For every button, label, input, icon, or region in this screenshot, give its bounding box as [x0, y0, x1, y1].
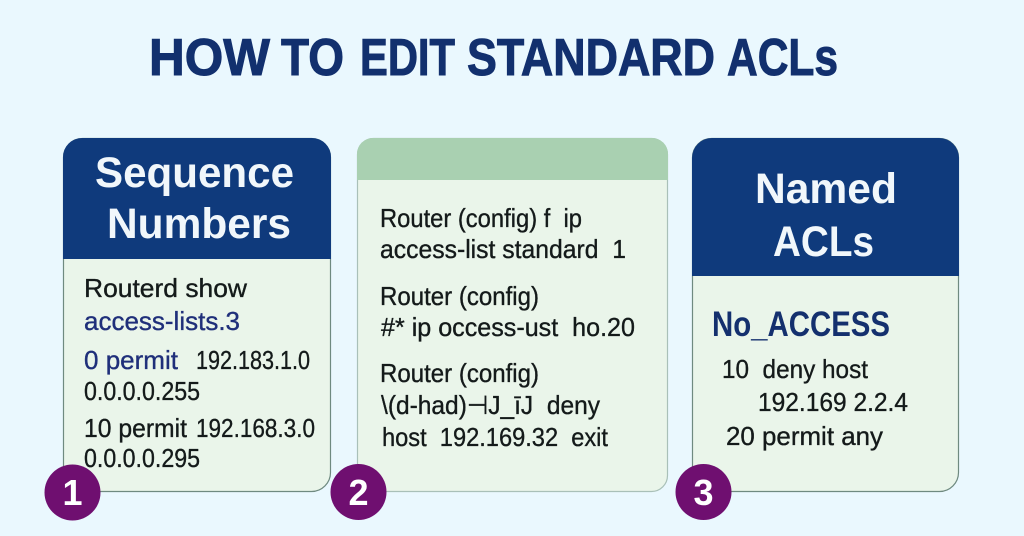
text block: show access-lists output: 0 permit: [84, 345, 179, 375]
heading: sequence numbers: Numbers: [107, 200, 291, 248]
panel: router config: [357, 138, 668, 492]
title: EDIT: [360, 29, 455, 87]
title: HOW: [149, 29, 271, 87]
panel header: green band: [357, 138, 668, 180]
title: TO: [281, 29, 344, 87]
panel body: sequence numbers: [64, 138, 330, 492]
heading: sequence numbers: [95, 149, 294, 248]
badge: step 1: 1: [62, 472, 83, 513]
text block: show access-lists output: 10 permit: [84, 413, 188, 443]
panel: sequence numbers: [63, 138, 331, 492]
panel header: named ACLs: [692, 138, 959, 276]
text block: ACL entries: 10 deny host: [722, 354, 869, 384]
text block: show access-lists output: [84, 273, 315, 473]
heading: named ACLs: Named: [755, 165, 897, 213]
panel body: router config: [358, 138, 668, 492]
panel body: named ACLs: [692, 138, 958, 492]
heading: sequence numbers: Sequence: [95, 149, 294, 197]
text block: ACL entries: 20 permit any: [726, 421, 883, 451]
text block: config commands: Router (config): [380, 281, 539, 311]
text block: config commands: Router (config): [380, 358, 539, 388]
text block: show access-lists output: 0.0.0.0.255: [84, 376, 200, 406]
text block: show access-lists output: 192.183.1.0: [196, 345, 310, 375]
text block: ACL entries: [722, 354, 908, 451]
heading: named ACLs: [755, 165, 897, 266]
badge: step 2: [330, 464, 386, 520]
badge: step 3: 3: [693, 472, 714, 513]
title: ACLs: [727, 29, 838, 87]
text block: config commands: \(d-had)⊣J_īJ deny: [381, 390, 600, 420]
title: [149, 29, 838, 87]
text block: show access-lists output: access-lists.3: [84, 306, 240, 336]
heading: named ACLs: ACLs: [773, 218, 874, 266]
text block: config commands: #* ip occess-ust ho.20: [381, 312, 635, 342]
badge: step 1: [44, 464, 100, 520]
text block: config commands: host 192.169.32 exit: [382, 422, 609, 452]
subheading: No_ACCESS: No_ACCESS: [712, 305, 890, 344]
text block: show access-lists output: 0.0.0.0.295: [84, 443, 200, 473]
title: STANDARD: [467, 29, 715, 87]
text block: ACL entries: 192.169 2.2.4: [758, 387, 908, 417]
panel header: sequence numbers: [63, 138, 331, 259]
text block: config commands: [380, 203, 635, 452]
text block: config commands: Router (config) f ip: [380, 203, 582, 233]
text block: show access-lists output: Routerd show: [84, 273, 247, 303]
panel: named ACLs: [692, 138, 959, 492]
text block: config commands: access-list standard 1: [380, 234, 626, 264]
badge: step 2: 2: [348, 472, 369, 513]
text block: show access-lists output: 192.168.3.0: [196, 413, 315, 443]
badge: step 3: [676, 464, 732, 520]
